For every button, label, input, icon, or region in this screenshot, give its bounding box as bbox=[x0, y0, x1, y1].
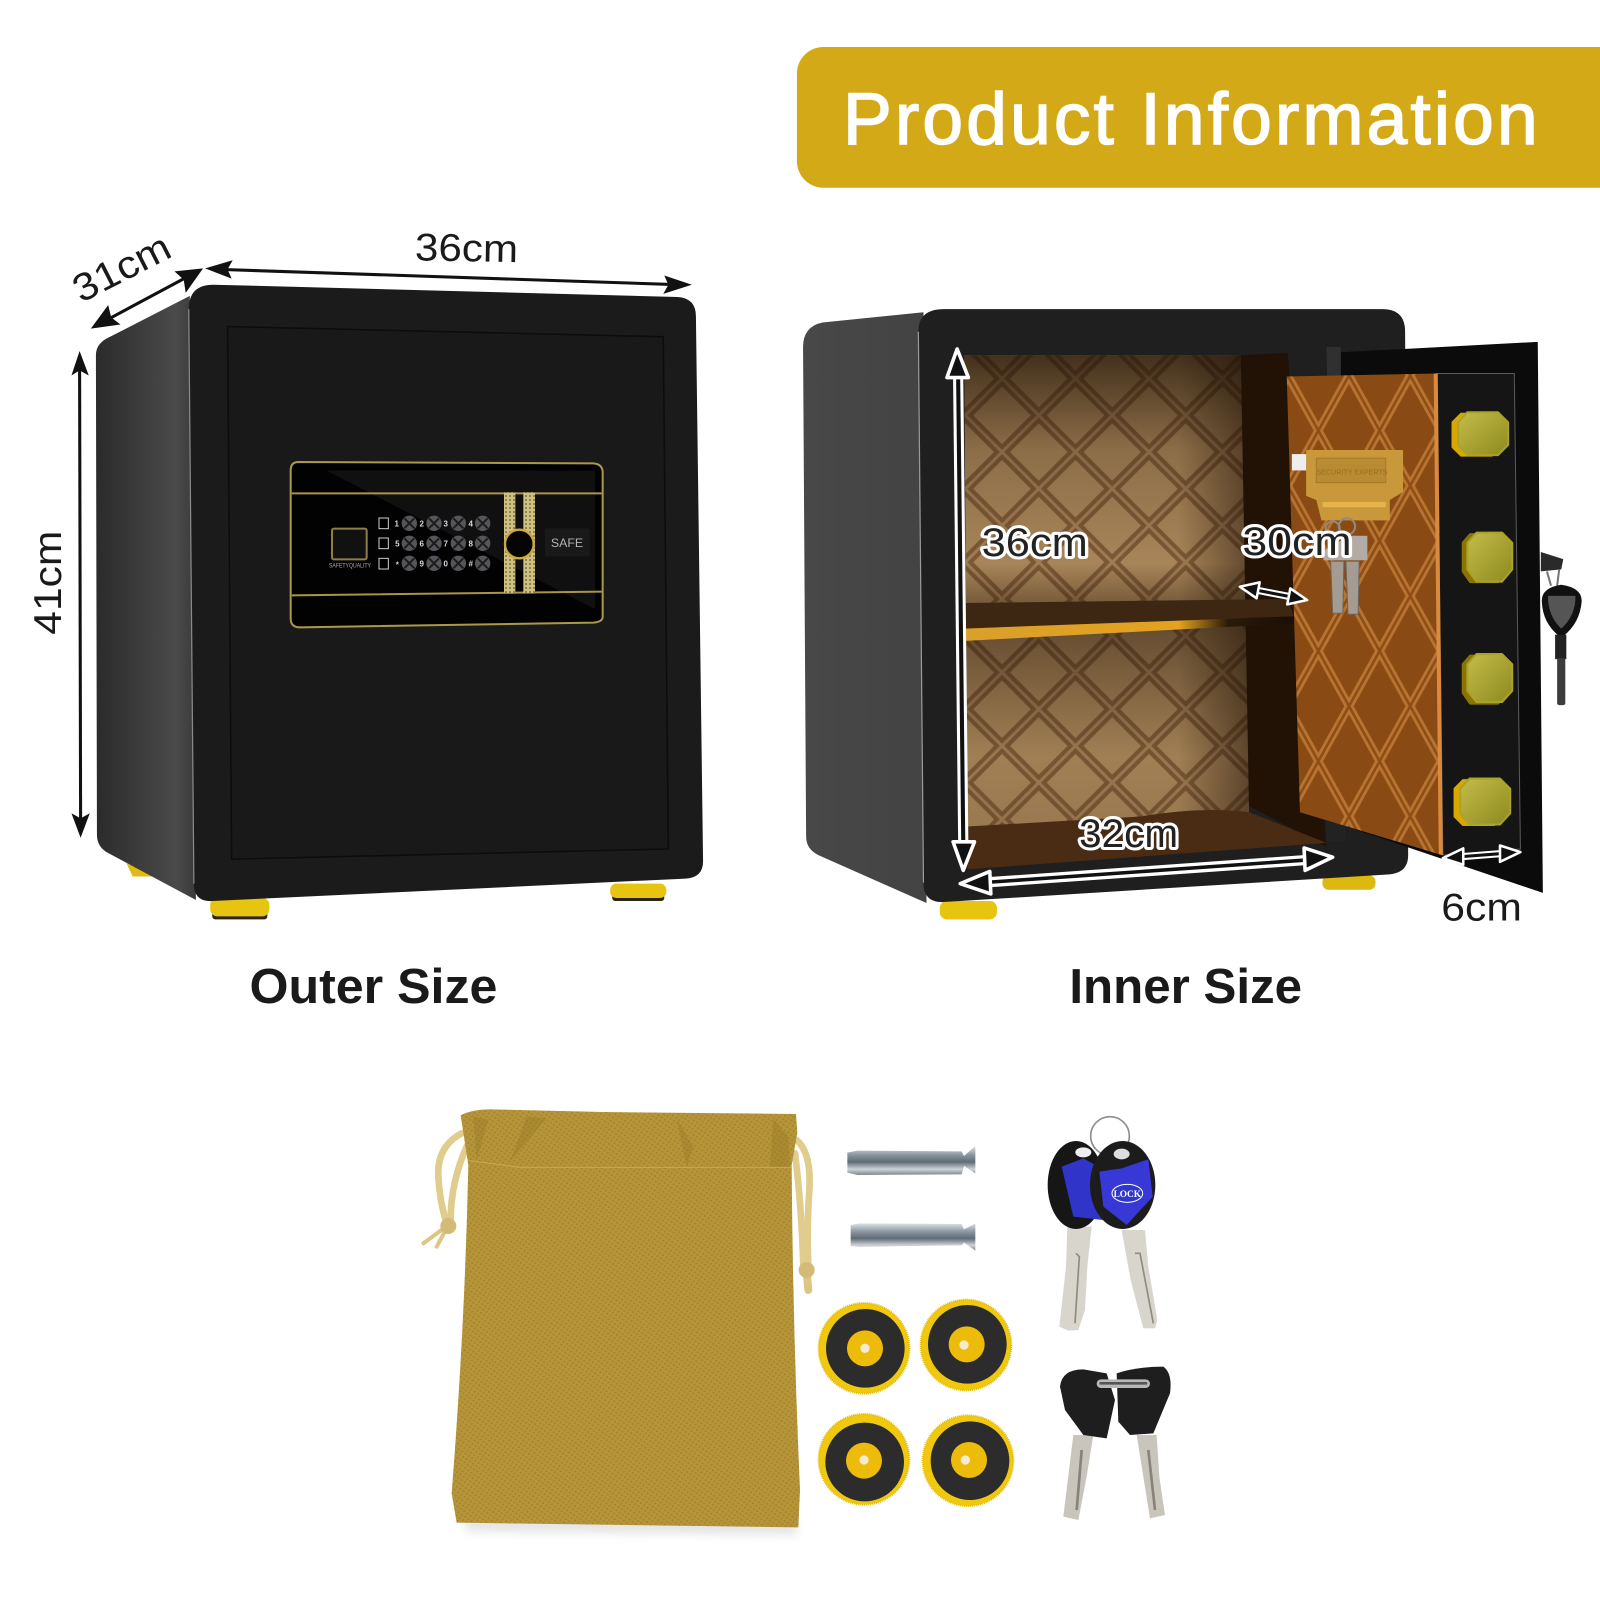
depth arrow bbox=[1240, 582, 1307, 604]
door depth arrow bbox=[1443, 846, 1520, 865]
drawstring left bbox=[423, 1133, 467, 1247]
dimension: depth 31cm: 31cm bbox=[66, 226, 178, 311]
inner labels bbox=[982, 520, 1352, 856]
feet bbox=[837, 852, 1376, 919]
dimension: width 36cm bbox=[205, 226, 692, 294]
title banner bbox=[797, 47, 1600, 188]
face edge highlight bbox=[189, 309, 194, 884]
keypad panel: 9 bbox=[419, 560, 424, 569]
keypad panel: 4 bbox=[468, 519, 473, 528]
outer safe illustration bbox=[96, 285, 703, 919]
hanging keys bbox=[1323, 518, 1367, 614]
bag hem and folds bbox=[469, 1117, 792, 1167]
keypad panel: 3 bbox=[443, 519, 448, 528]
keypad panel: * bbox=[396, 560, 400, 569]
label: inner size: Inner Size bbox=[1069, 960, 1302, 1014]
lining edge bbox=[1434, 373, 1443, 855]
shelf bbox=[965, 599, 1294, 641]
black fob keys bbox=[1060, 1367, 1171, 1520]
hanging key on lock bbox=[1541, 552, 1582, 705]
safe front face bbox=[189, 285, 703, 901]
keypad panel: 1 bbox=[394, 519, 399, 528]
drawstring right bbox=[795, 1140, 815, 1290]
keypad panel: 8 bbox=[468, 539, 473, 548]
front frame bbox=[918, 309, 1408, 902]
keypad panel: SAFETYQUALITY bbox=[329, 563, 371, 570]
keypad panel: SAFE bbox=[551, 536, 583, 550]
keypad panel: 2 bbox=[419, 519, 424, 528]
keypad panel bbox=[291, 462, 603, 627]
key holder: SECURITY EXPERTS bbox=[1317, 468, 1388, 476]
door outline bbox=[228, 327, 668, 859]
horizontal arrow bbox=[960, 848, 1333, 894]
keypad panel: 5 bbox=[395, 539, 400, 548]
door lining bbox=[1287, 373, 1442, 855]
bolts bbox=[1453, 412, 1512, 824]
safe side wall bbox=[96, 296, 196, 900]
door inner edge bbox=[1437, 373, 1520, 855]
feet bbox=[127, 863, 666, 919]
blue fob keys: LOCK bbox=[1114, 1190, 1142, 1200]
keypad panel: # bbox=[468, 560, 473, 569]
dimension: width 36cm: 36cm bbox=[415, 226, 518, 271]
dimension: height 41cm bbox=[27, 351, 90, 838]
frame edge highlight bbox=[918, 332, 923, 883]
key holder bbox=[1292, 450, 1403, 520]
keypad panel: 6 bbox=[419, 539, 424, 548]
expansion bolts bbox=[847, 1146, 975, 1251]
keypad panel: 7 bbox=[443, 539, 448, 548]
inner labels: 32cm bbox=[1079, 812, 1178, 856]
blue fob keys bbox=[1048, 1117, 1157, 1331]
dimension: height 41cm: 41cm bbox=[27, 531, 70, 635]
vertical arrow bbox=[947, 349, 974, 870]
title banner: Product Information bbox=[843, 77, 1538, 160]
side wall bbox=[803, 312, 927, 903]
inner labels: 30cm bbox=[1242, 520, 1352, 564]
dimension: depth 31cm bbox=[66, 226, 203, 329]
bag body bbox=[452, 1109, 800, 1527]
inner labels: 36cm bbox=[982, 521, 1088, 565]
label: outer size: Outer Size bbox=[249, 960, 497, 1014]
label: 6cm: 6cm bbox=[1441, 886, 1522, 929]
interior side wall bbox=[1241, 353, 1327, 847]
bag shadow bbox=[463, 1517, 798, 1535]
interior back wall bbox=[964, 355, 1249, 829]
open door rear plate bbox=[1316, 342, 1543, 893]
keypad panel: 0 bbox=[443, 560, 448, 569]
interior floor bbox=[967, 810, 1327, 869]
inner safe illustration bbox=[803, 309, 1582, 929]
hinges bbox=[1327, 347, 1345, 842]
rubber feet bbox=[819, 1300, 1013, 1506]
accessory: drawstring bag bbox=[423, 1109, 815, 1535]
accessories: expansion bolts, rubber feet and keys bbox=[819, 1117, 1171, 1520]
